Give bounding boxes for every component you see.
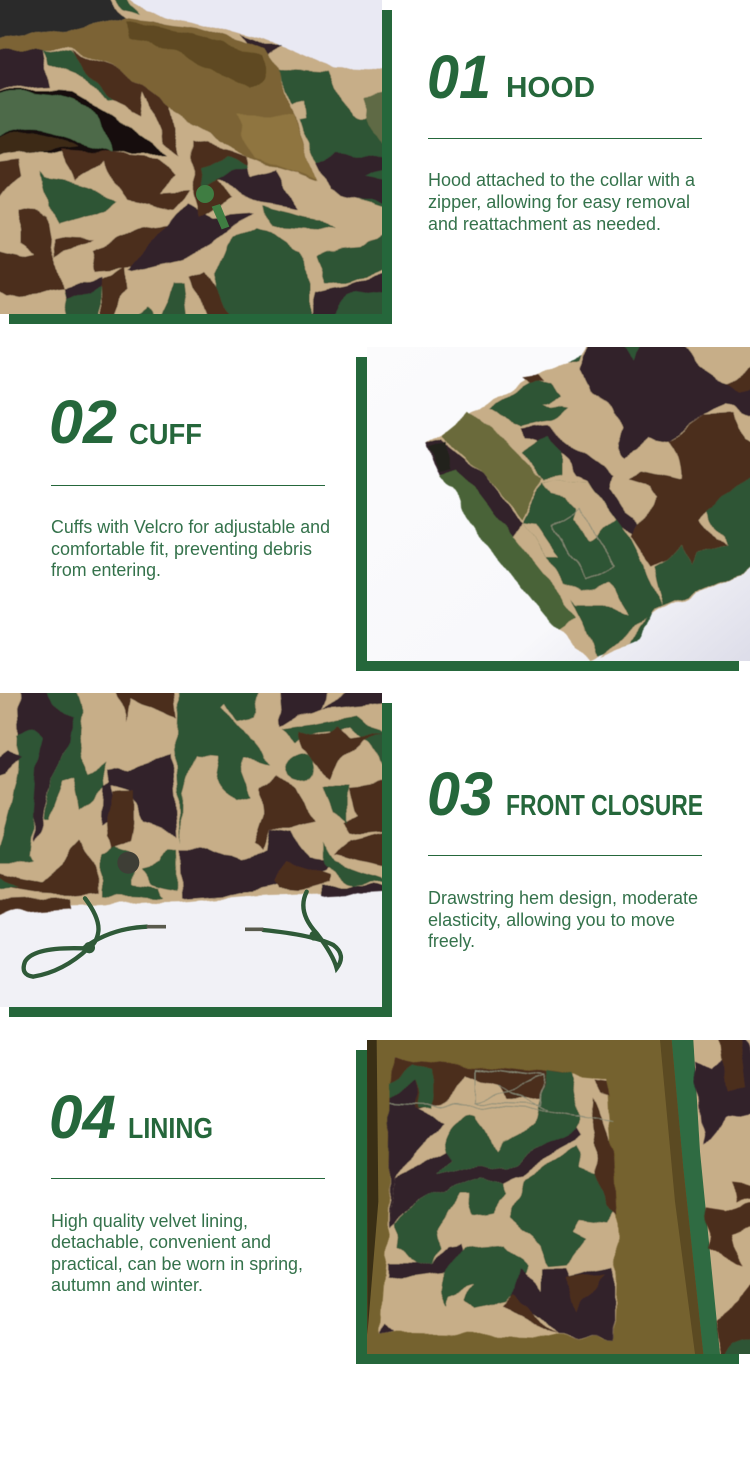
heading: 04 lining: LINING [128, 1113, 213, 1145]
text: hood description [428, 170, 696, 234]
text: lining description: practical, can be worn in spring, [51, 1254, 303, 1274]
text: cuff description: Cuffs with Velcro for adjustable and [51, 517, 330, 537]
icon: snap button [117, 852, 139, 874]
heading: 01 hood [427, 43, 595, 111]
text: front closure description: freely. [428, 931, 475, 951]
photo frame: hood [9, 10, 392, 324]
icon: zipper pull [196, 185, 229, 229]
photo frame: cuff [356, 357, 739, 671]
photo: velcro cuff [424, 347, 750, 661]
heading: 01 hood: HOOD [506, 72, 595, 104]
heading: 01 hood: 01 [427, 43, 491, 111]
velcro strap [440, 413, 542, 520]
photo: fleece lining pocket [367, 1040, 750, 1354]
heading: 03 front closure: FRONT CLOSURE [506, 790, 703, 822]
panel: front closure [0, 685, 393, 1017]
heading: 03 front closure [427, 760, 703, 828]
heading: 02 cuff: 02 [49, 388, 117, 456]
heading: 03 front closure: 03 [427, 760, 493, 828]
cuff flap [523, 482, 663, 655]
text: lining description: High quality velvet lining, [51, 1211, 248, 1231]
inner pocket [380, 1058, 617, 1338]
text: front closure description [428, 888, 698, 951]
panel: lining [356, 1035, 750, 1364]
photo: hood and collar zipper [0, 0, 382, 314]
photo frame: lining [356, 1050, 739, 1364]
text: hood description: Hood attached to the collar with a [428, 170, 696, 190]
text: cuff description: comfortable fit, preventing debris [51, 539, 312, 559]
text: lining description [51, 1211, 303, 1295]
text: front closure description: elasticity, allowing you to move [428, 910, 675, 930]
text: cuff description [51, 517, 330, 580]
heading: 04 lining: 04 [49, 1083, 116, 1151]
text: cuff description: from entering. [51, 560, 161, 580]
heading: 02 cuff: CUFF [129, 419, 202, 451]
text: lining description: autumn and winter. [51, 1275, 203, 1295]
text: lining description: detachable, convenient and [51, 1232, 271, 1252]
heading: 04 lining [49, 1083, 213, 1151]
drawstring cords [24, 892, 341, 977]
photo: drawstring hem [0, 693, 382, 1007]
text: hood description: zipper, allowing for easy removal [428, 192, 690, 212]
heading: 02 cuff [49, 388, 202, 456]
panel: cuff [356, 340, 750, 671]
text: front closure description: Drawstring hem design, moderate [428, 888, 698, 908]
panel: hood [0, 0, 393, 324]
text: hood description: and reattachment as needed. [428, 214, 661, 234]
photo frame: front closure [9, 703, 392, 1017]
